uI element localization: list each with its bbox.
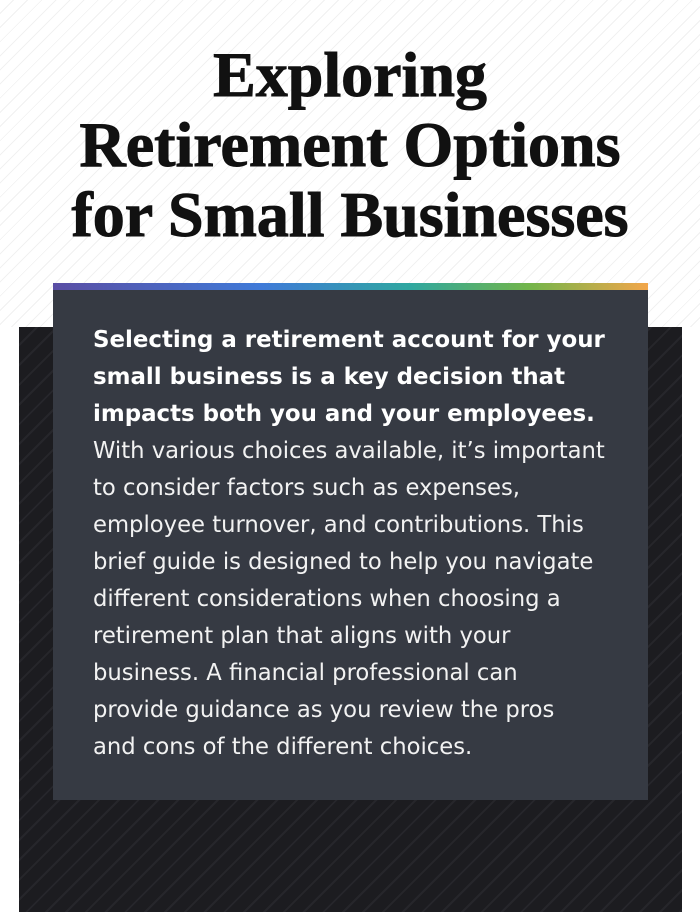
- title: for Small Businesses: [71, 179, 629, 250]
- text block: intro: different considerations when choosing a: [93, 586, 561, 612]
- panel: intro card: [53, 283, 648, 800]
- text block: intro: and cons of the different choices.: [93, 734, 472, 760]
- text block: intro: employee turnover, and contributions. This: [93, 512, 584, 538]
- text block: intro: Selecting a retirement account for your: [93, 327, 605, 353]
- text block: intro: business. A financial professional can: [93, 660, 518, 686]
- text block: intro: small business is a key decision that: [93, 364, 565, 390]
- title: [71, 39, 629, 250]
- text block: intro: to consider factors such as expenses,: [93, 475, 520, 501]
- text block: intro: [93, 327, 605, 760]
- gradient bar: [53, 283, 648, 290]
- text block: intro: With various choices available, it’s important: [93, 438, 605, 464]
- text block: intro: impacts both you and your employees.: [93, 401, 595, 427]
- text block: intro: brief guide is designed to help you navigate: [93, 549, 593, 575]
- text block: intro: provide guidance as you review the pros: [93, 697, 554, 723]
- text block: intro: retirement plan that aligns with your: [93, 623, 510, 649]
- title: Exploring: [213, 39, 487, 110]
- title: Retirement Options: [80, 109, 620, 180]
